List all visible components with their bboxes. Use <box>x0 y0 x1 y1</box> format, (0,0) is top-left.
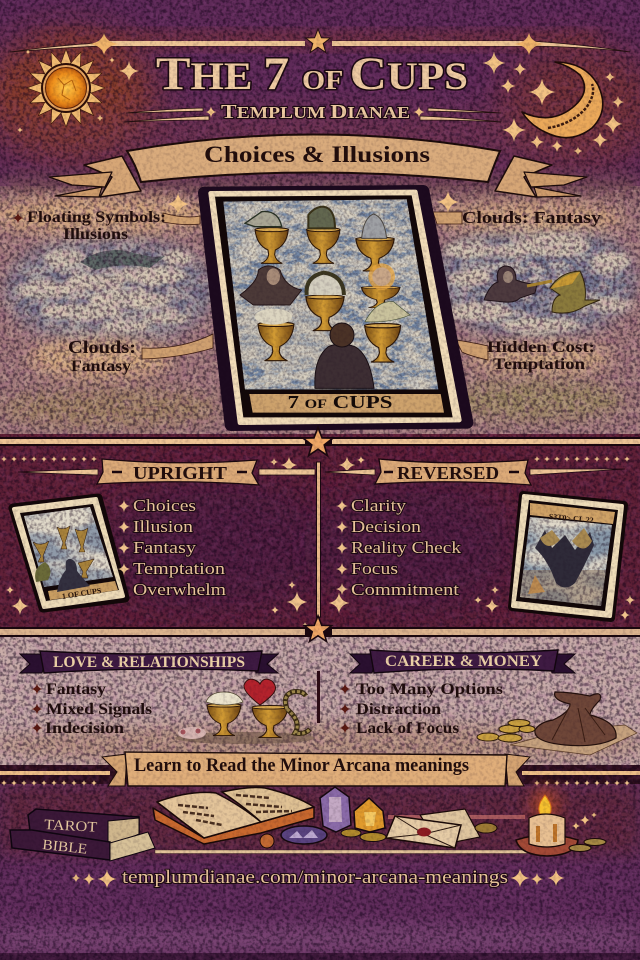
callout: floating symbols: Illusions <box>63 226 128 243</box>
list: reversed meanings: Clarity <box>351 496 407 515</box>
dotted ornaments <box>1 456 635 786</box>
list: career <box>340 681 503 737</box>
list: upright meanings: Fantasy <box>133 538 197 557</box>
list: reversed meanings <box>336 496 462 599</box>
list: reversed meanings: Decision <box>351 517 422 536</box>
card picture: cloaked figure <box>315 323 374 388</box>
callout: clouds fantasy right: Clouds: Fantasy <box>462 208 602 227</box>
callout ribbons <box>142 212 488 360</box>
icon: open book <box>153 788 314 848</box>
band: upright reversed <box>0 434 640 630</box>
subtitle: Templum Dianae: TEMPLUM DIANAE <box>221 101 410 123</box>
list: upright meanings: Choices <box>133 496 196 515</box>
icon: sealed envelope and letter <box>386 809 497 848</box>
subtitle: Templum Dianae <box>124 101 501 123</box>
callout: floating symbols <box>12 209 166 243</box>
website URL line: templumdianae.com/minor-arcana-meanings <box>122 867 508 888</box>
small card: upright <box>13 498 125 608</box>
list: career: Lack of Focus <box>356 720 459 737</box>
cloud panel base <box>0 186 640 434</box>
list: love: Indecision <box>45 720 124 737</box>
title: THE 7 OF CUPS <box>156 48 468 100</box>
list: upright meanings: Illusion <box>133 517 194 536</box>
banner: upright <box>18 459 315 485</box>
banner: learn to read: Learn to Read the Minor Arcana meanings <box>134 755 469 776</box>
top ornamental rule <box>10 29 630 55</box>
banner: reversed <box>325 459 625 485</box>
illustration: two cups heart and snake <box>175 679 315 744</box>
icon: lit candle <box>516 787 606 856</box>
list: career: Too Many Options <box>356 681 503 698</box>
icon: sun <box>27 49 105 127</box>
main ribbon banner: Choices & Illusions <box>49 134 587 197</box>
icon: Tarot and Bible books: BIBLE <box>42 837 88 858</box>
divider between love and career <box>317 671 320 723</box>
main tarot card <box>204 191 467 425</box>
rule with star above the meanings band <box>0 427 640 456</box>
callout: clouds fantasy left: Clouds: <box>68 337 136 357</box>
callout: floating symbols: Floating Symbols: <box>27 209 166 226</box>
band: footer <box>0 766 640 960</box>
band: love and career <box>0 636 640 768</box>
banner: love and relationships <box>20 651 278 673</box>
card picture: seven cups <box>240 207 410 362</box>
callout: hidden cost temptation <box>487 339 595 373</box>
icon: crystals and coins <box>281 787 386 844</box>
icon: Tarot and Bible books: TAROT <box>44 817 98 836</box>
illustration: hooded figure and creature <box>484 266 600 313</box>
icon: Tarot and Bible books <box>10 809 155 861</box>
callout: clouds fantasy left <box>68 337 136 375</box>
banner: career and money: CAREER & MONEY <box>385 653 542 670</box>
small card: reversed <box>512 495 624 618</box>
rule with star below the meanings band <box>0 616 640 642</box>
shelf line and rose bar <box>155 815 527 854</box>
main ribbon banner: Choices & Illusions: Choices & Illusions <box>204 142 430 167</box>
card title: 7 of cups: 7 OF CUPS <box>287 392 392 412</box>
list: upright meanings: Temptation <box>133 559 226 578</box>
callout: clouds fantasy left: Fantasy <box>71 358 131 375</box>
list: reversed meanings: Reality Check <box>351 538 462 557</box>
list: love: Fantasy <box>46 681 106 698</box>
icon: crescent moon <box>522 62 603 138</box>
small card: reversed: S3T0> CL 22 <box>548 512 594 525</box>
banner: upright: UPRIGHT <box>133 463 227 483</box>
banner: love and relationships: LOVE & RELATIONSHIPS <box>53 654 245 671</box>
list: love <box>32 681 152 737</box>
vertical divider <box>316 462 320 617</box>
list: upright meanings <box>118 496 226 599</box>
banner: career and money <box>350 650 575 673</box>
banner: reversed: REVERSED <box>397 463 499 483</box>
card corner stars <box>167 191 459 215</box>
list: reversed meanings: Focus <box>351 559 398 578</box>
decorative stars around the title <box>17 50 624 156</box>
list: upright meanings: Overwhelm <box>133 580 226 599</box>
website URL line <box>72 867 564 888</box>
list: love: Mixed Signals <box>46 701 152 718</box>
list: reversed meanings: Commitment <box>351 580 459 599</box>
rule behind learn banner <box>0 771 640 775</box>
callout: hidden cost temptation: Temptation <box>493 356 585 373</box>
illustration: coin pouch and coins <box>477 692 637 755</box>
banner: learn to read <box>102 752 530 786</box>
list: career: Distraction <box>356 701 441 718</box>
small card: upright: 1 OF CUPS <box>61 586 102 601</box>
callout: hidden cost temptation: Hidden Cost: <box>487 339 595 356</box>
